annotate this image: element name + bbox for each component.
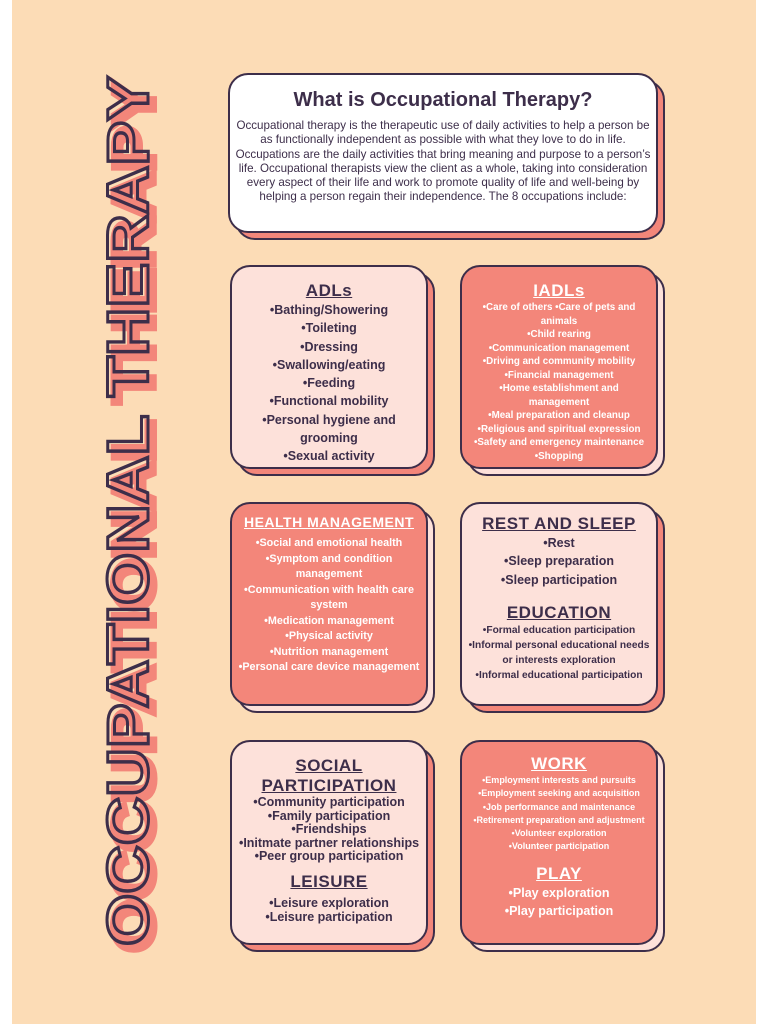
text: •Toileting — [301, 321, 357, 335]
vertical title: OCCUPATIONAL THERAPY — [96, 76, 161, 946]
text: •Informal educational participation — [475, 670, 643, 681]
text: •Play participation — [505, 904, 613, 918]
text: •Social and emotional health — [256, 537, 402, 549]
text: •Meal preparation and cleanup — [488, 410, 630, 421]
text: •Personal care device management — [239, 661, 419, 673]
text: •Rest — [543, 536, 575, 550]
panel: rest and sleep / education — [460, 502, 665, 713]
panel: ADLs — [230, 265, 435, 476]
text: •Medication management — [264, 614, 394, 626]
text: •Communication with health care system — [244, 584, 414, 611]
text: •Physical activity — [285, 630, 373, 642]
text: •Religious and spiritual expression — [478, 424, 640, 434]
text: •Swallowing/eating — [273, 358, 385, 372]
text: PLAY — [536, 864, 582, 883]
panel: social participation / leisure — [230, 740, 435, 952]
text: •Driving and community mobility — [483, 356, 635, 367]
vertical title: OCCUPATIONAL THERAPY — [102, 82, 167, 952]
text: •Peer group participation — [255, 849, 403, 863]
text: REST AND SLEEP — [482, 514, 636, 533]
text: •Employment seeking and acquisition — [478, 788, 640, 798]
text: ADLs — [306, 281, 352, 300]
text: LEISURE — [290, 872, 368, 890]
text: •Employment interests and pursuits — [482, 775, 636, 785]
text: •Nutrition management — [270, 646, 388, 658]
text: •Child rearing — [527, 329, 591, 340]
text: •Sexual activity — [283, 449, 375, 463]
text: •Care of others •Care of pets and animals — [483, 302, 635, 326]
text: •Play exploration — [509, 886, 609, 900]
text: •Functional mobility — [270, 394, 388, 408]
text: •Safety and emergency maintenance — [474, 437, 644, 448]
text: •Retirement preparation and adjustment — [473, 815, 645, 825]
heading: What is OT: What is Occupational Therapy? — [294, 89, 592, 111]
text: •Initmate partner relationships — [239, 836, 419, 850]
text: •Leisure exploration — [269, 896, 389, 910]
text: •Financial management — [504, 370, 614, 380]
intro text: Occupational therapy is the therapeutic use of daily activities to help a person be as functionally independent as possible with what they love to do in life. Occupations are the daily activities that bring meaning and purpose to a person’s life. Occupational therapists view the client as a whole, taking into consideration every aspect of their life and work to promote quality of life and well-being by helping a person regain their independence. The 8 occupations include: — [236, 119, 650, 203]
text: •Friendships — [291, 822, 367, 836]
text: •Volunteer participation — [509, 841, 609, 851]
text: •Shopping — [535, 450, 583, 462]
text: HEALTH MANAGEMENT — [244, 514, 414, 530]
panel: health management — [230, 502, 435, 713]
text: •Sleep preparation — [504, 554, 614, 568]
text: PARTICIPATION — [262, 776, 396, 795]
panel: IADLs — [460, 265, 665, 476]
text: •Job performance and maintenance — [483, 802, 635, 812]
panel: work / play — [460, 740, 665, 952]
text: •Volunteer exploration — [512, 828, 606, 838]
text: •Feeding — [303, 376, 355, 390]
text: •Leisure participation — [265, 910, 393, 924]
text: •Bathing/Showering — [270, 303, 388, 317]
text: •Personal hygiene and grooming — [262, 413, 396, 445]
text: •Community participation — [253, 795, 405, 809]
text: IADLs — [533, 281, 585, 300]
text: EDUCATION — [507, 603, 611, 622]
panel: intro — [228, 73, 665, 240]
text: •Family participation — [268, 808, 390, 822]
text: •Dressing — [300, 340, 358, 354]
text: WORK — [531, 754, 587, 773]
text: •Sleep participation — [501, 573, 617, 587]
text: •Symptom and condition management — [266, 552, 392, 580]
text: •Informal personal educational needs or interests exploration — [469, 640, 649, 666]
text: •Communication management — [489, 342, 629, 354]
text: SOCIAL — [295, 756, 363, 775]
text: •Formal education participation — [483, 625, 635, 636]
text: •Home establishment and management — [499, 383, 619, 408]
